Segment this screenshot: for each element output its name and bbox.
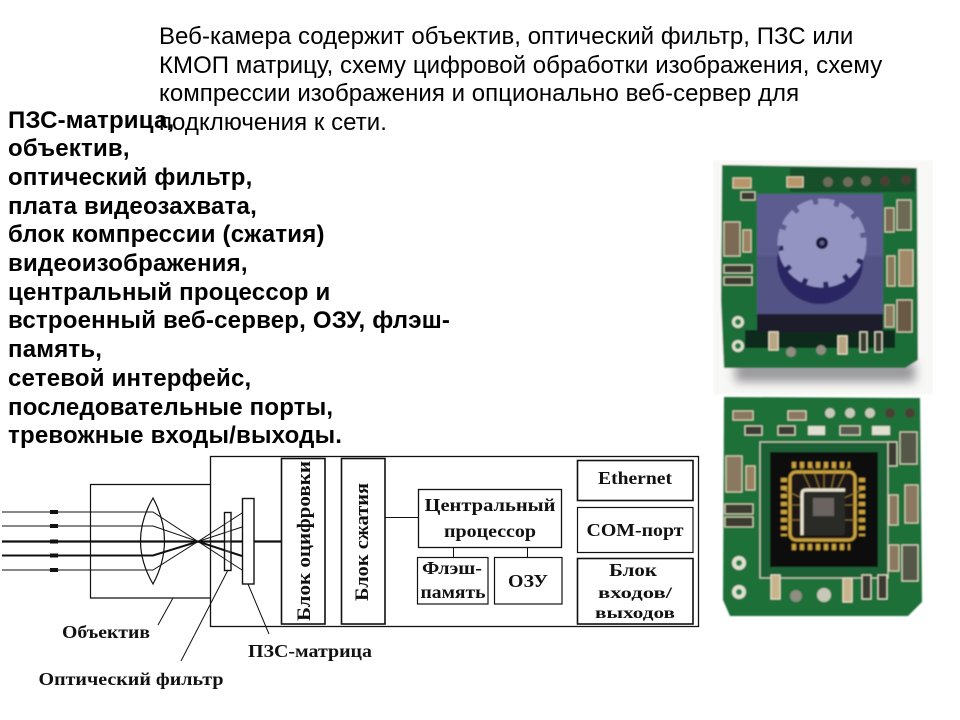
block: flash memory: Флэш- <box>422 558 482 578</box>
text block: webcam description: КМОП матрицу, схему цифровой обработки изображения, схему <box>159 52 882 79</box>
text block: component list: тревожные входы/выходы. <box>8 422 342 449</box>
block: digitizing: Блок оцифровки <box>294 461 315 621</box>
text block: component list: последовательные порты, <box>8 394 333 421</box>
text block: component list: ПЗС-матрица, <box>8 106 174 134</box>
text block: webcam description <box>159 23 882 136</box>
block: CPU <box>418 490 562 548</box>
block: RAM <box>494 558 562 604</box>
block: Ethernet: Ethernet <box>598 468 672 488</box>
block: COM port <box>578 508 693 552</box>
light rays <box>2 512 281 570</box>
text block: component list: встроенный веб-сервер, ОЗУ, флэш- <box>8 307 450 334</box>
block: flash memory <box>418 558 488 604</box>
block: digitizing <box>282 458 325 624</box>
text block: component list: видеоизображения, <box>8 250 248 277</box>
photo: module with lens <box>713 160 933 395</box>
block: I/O: выходов <box>595 605 675 622</box>
CCD sensor <box>242 498 254 584</box>
optical filter <box>224 512 231 570</box>
lens <box>140 498 164 584</box>
label: lens: Объектив <box>62 622 150 642</box>
label: CCD sensor: ПЗС-матрица <box>248 641 372 661</box>
block: flash memory: память <box>420 582 486 602</box>
text block: component list: объектив, <box>8 135 130 162</box>
lens housing <box>90 484 210 598</box>
text block: component list <box>8 106 450 449</box>
block: compression <box>342 458 385 624</box>
label: optical filter: Оптический фильтр <box>38 669 223 689</box>
block: compression: Блок сжатия <box>352 483 373 601</box>
text block: component list: сетевой интерфейс, <box>8 365 251 392</box>
block: RAM: ОЗУ <box>508 571 548 591</box>
block: I/O: Блок <box>609 560 658 580</box>
text block: component list: центральный процессор и <box>8 279 330 306</box>
block: CPU: процессор <box>444 521 536 541</box>
text block: component list: плата видеозахвата, <box>8 193 257 220</box>
photo: module with sensor <box>723 397 922 616</box>
leader lines <box>158 570 269 661</box>
block: CPU: Центральный <box>424 495 556 515</box>
block: I/O: входов/ <box>598 585 673 602</box>
text block: webcam description: подключения к сети. <box>159 109 387 136</box>
connector lines <box>385 518 528 557</box>
text block: component list: память, <box>8 336 102 363</box>
text block: component list: оптический фильтр, <box>8 164 252 191</box>
text block: component list: блок компрессии (сжатия) <box>8 221 325 248</box>
block: Ethernet <box>578 460 693 500</box>
diagram: webcam block diagram <box>2 456 698 689</box>
block: I/O <box>578 558 693 624</box>
camera body frame <box>210 456 698 626</box>
text block: webcam description: компрессии изображения и опционально веб-сервер для <box>159 80 799 107</box>
block: COM port: СОМ-порт <box>586 520 684 540</box>
text block: webcam description: Веб-камера содержит объектив, оптический фильтр, ПЗС или <box>159 23 853 50</box>
